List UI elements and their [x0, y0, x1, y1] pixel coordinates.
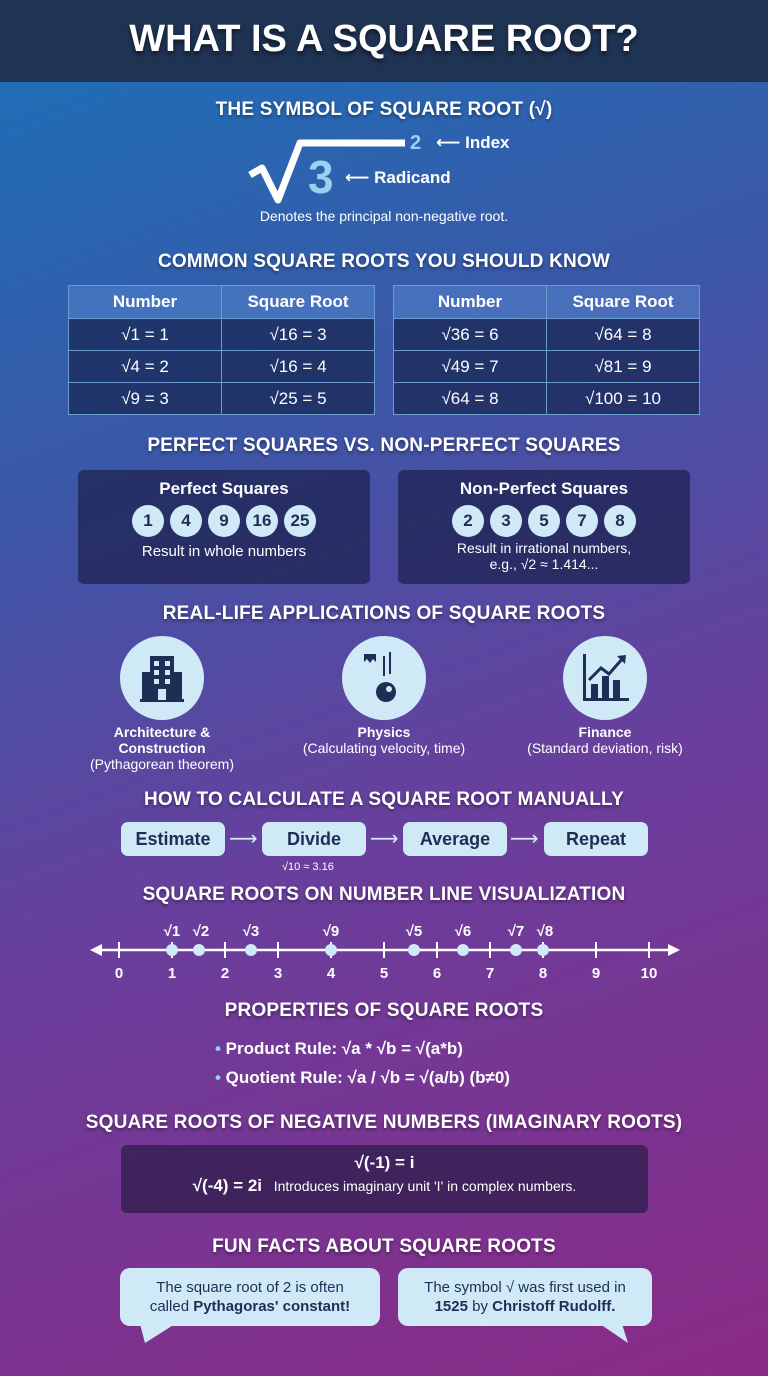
- number line: 4: [327, 965, 336, 982]
- panel: non-perfect: e.g., √2 ≈ 1.414...: [490, 556, 598, 572]
- icon: building: [120, 636, 204, 720]
- step: estimate: [121, 822, 225, 856]
- table right: [393, 285, 700, 415]
- panel: imaginary: [121, 1145, 648, 1213]
- icon: physics: [342, 636, 426, 720]
- number line: √6: [455, 923, 471, 940]
- steps: [121, 822, 648, 873]
- table right: Number: [438, 292, 502, 311]
- bubble: fact 2: The symbol √ was first used in: [424, 1279, 626, 1296]
- heading: perfect: PERFECT SQUARES VS. NON-PERFECT SQUARES: [147, 435, 621, 456]
- diagram: radical: ⟵ Index: [436, 133, 510, 152]
- table right: √81 = 9: [594, 356, 652, 376]
- label: physics: (Calculating velocity, time): [303, 740, 465, 756]
- number line: 1: [168, 965, 176, 982]
- step: divide: [262, 822, 366, 856]
- number line: 7: [486, 965, 494, 982]
- panel: imaginary: √(-1) = i: [355, 1153, 414, 1172]
- table left: √16 = 3: [269, 324, 327, 344]
- label: physics: Physics: [358, 724, 410, 740]
- table right: √100 = 10: [585, 388, 661, 408]
- number line: [90, 923, 680, 982]
- label: finance: Finance: [579, 724, 631, 740]
- panel: non-perfect: 8: [615, 511, 625, 530]
- diagram: radical: [248, 132, 510, 204]
- number line: 6: [433, 965, 441, 982]
- panel: non-perfect: 2: [463, 511, 473, 530]
- text: denotes: Denotes the principal non-negative root.: [260, 208, 508, 224]
- rules: • Quotient Rule: √a / √b = √(a/b) (b≠0): [215, 1068, 510, 1087]
- arrow: ⟶: [510, 828, 539, 850]
- table right: √64 = 8: [594, 324, 652, 344]
- step: repeat: Repeat: [566, 829, 626, 849]
- table right: √64 = 8: [441, 388, 499, 408]
- panel: perfect: Result in whole numbers: [142, 543, 306, 560]
- panel: perfect: 9: [219, 511, 229, 530]
- icon: finance: [563, 636, 647, 720]
- header band: [0, 0, 768, 82]
- number line: 0: [115, 965, 123, 982]
- table left: [68, 285, 375, 415]
- panel: imaginary: √(-4) = 2i Introduces imaginary unit 'I' in complex numbers.: [193, 1176, 576, 1195]
- panel: non-perfect: [398, 470, 690, 584]
- number line: √5: [406, 923, 422, 940]
- bubble: fact 1: [120, 1268, 380, 1326]
- label: architecture: Construction: [118, 740, 206, 756]
- number line: 5: [380, 965, 388, 982]
- panel: perfect: 1: [143, 511, 153, 530]
- heading: common: COMMON SQUARE ROOTS YOU SHOULD KNOW: [158, 251, 610, 272]
- step: divide: Divide: [287, 829, 341, 849]
- heading: number line: SQUARE ROOTS ON NUMBER LINE VISUALIZATION: [143, 884, 625, 905]
- number line: 9: [592, 965, 600, 982]
- heading: real-life: REAL-LIFE APPLICATIONS OF SQUARE ROOTS: [163, 603, 605, 624]
- number line: √2: [193, 923, 209, 940]
- bubble tails: [140, 1326, 628, 1343]
- table left: √4 = 2: [121, 356, 169, 376]
- step: repeat: [544, 822, 648, 856]
- heading: properties: PROPERTIES OF SQUARE ROOTS: [225, 1000, 543, 1021]
- panel: perfect: 25: [291, 511, 309, 530]
- title: WHAT IS A SQUARE ROOT?: [129, 18, 639, 60]
- label: architecture: (Pythagorean theorem): [90, 756, 234, 772]
- label: architecture: Architecture &: [114, 724, 210, 740]
- step: average: Average: [420, 829, 490, 849]
- panel: perfect: 16: [253, 511, 271, 530]
- step: estimate: Estimate: [135, 829, 211, 849]
- bubble: fact 1: The square root of 2 is often: [156, 1279, 344, 1296]
- panel: non-perfect: 5: [539, 511, 549, 530]
- label: physics: [303, 724, 465, 756]
- panel: perfect: [78, 470, 370, 584]
- label: finance: (Standard deviation, risk): [527, 740, 683, 756]
- rules: [215, 1039, 510, 1087]
- step: average: [403, 822, 507, 856]
- diagram: radical: 2: [410, 132, 421, 154]
- table left: √1 = 1: [121, 324, 169, 344]
- label: architecture: [90, 724, 234, 772]
- note: √10 ≈ 3.16: [282, 861, 334, 873]
- diagram: radical: 3: [308, 151, 334, 203]
- number line: √3: [243, 923, 259, 940]
- heading: fun facts: FUN FACTS ABOUT SQUARE ROOTS: [212, 1236, 556, 1257]
- bubble: fact 2: 1525 by Christoff Rudolff.: [435, 1298, 615, 1315]
- table left: √9 = 3: [121, 388, 169, 408]
- number line: 2: [221, 965, 229, 982]
- number line: 3: [274, 965, 282, 982]
- table left: Square Root: [247, 292, 349, 311]
- table left: Number: [113, 292, 177, 311]
- table right: √49 = 7: [441, 356, 499, 376]
- heading: how to: HOW TO CALCULATE A SQUARE ROOT MANUALLY: [144, 789, 624, 810]
- panel: non-perfect: Non-Perfect Squares: [460, 479, 628, 498]
- number line: 10: [641, 965, 657, 982]
- table right: Square Root: [572, 292, 674, 311]
- panel: non-perfect: 3: [501, 511, 511, 530]
- label: finance: [527, 724, 683, 756]
- bubble: fact 2: [398, 1268, 652, 1326]
- panel: perfect: 4: [181, 511, 191, 530]
- panel: perfect: Perfect Squares: [159, 479, 289, 498]
- panel: non-perfect: Result in irrational numbers,: [457, 540, 631, 556]
- number line: √8: [537, 923, 553, 940]
- number line: √9: [323, 923, 339, 940]
- arrow: ⟶: [229, 828, 258, 850]
- table right: √36 = 6: [441, 324, 499, 344]
- table left: √16 = 4: [269, 356, 327, 376]
- heading: symbol: THE SYMBOL OF SQUARE ROOT (√): [216, 99, 552, 120]
- number line: √7: [508, 923, 524, 940]
- rules: • Product Rule: √a * √b = √(a*b): [215, 1039, 463, 1058]
- heading: imaginary: SQUARE ROOTS OF NEGATIVE NUMBERS (IMAGINARY ROOTS): [86, 1112, 682, 1133]
- table left: √25 = 5: [269, 388, 327, 408]
- number line: √1: [164, 923, 180, 940]
- bubble: fact 1: called Pythagoras' constant!: [150, 1298, 350, 1315]
- arrow: ⟶: [370, 828, 399, 850]
- number line: 8: [539, 965, 547, 982]
- panel: non-perfect: 7: [577, 511, 587, 530]
- diagram: radical: ⟵ Radicand: [345, 168, 451, 187]
